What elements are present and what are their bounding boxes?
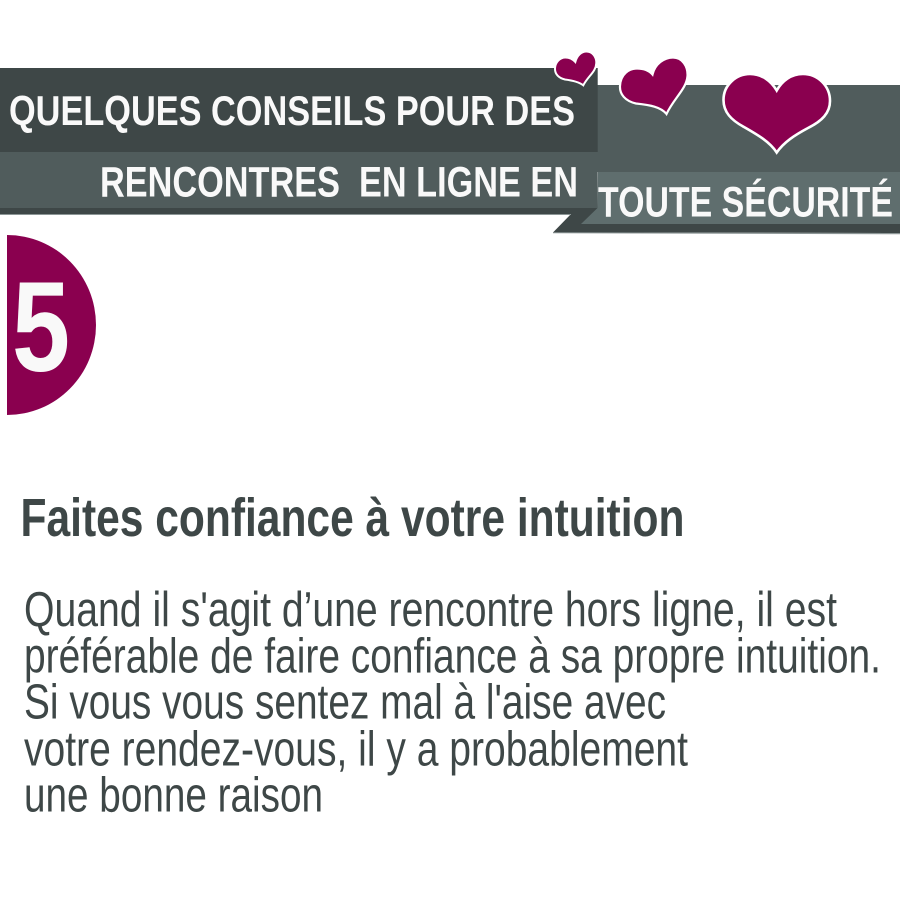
tip body text: une bonne raison bbox=[24, 769, 323, 823]
tip body text: Si vous vous sentez mal à l'aise avec bbox=[24, 676, 666, 730]
heading line 1: QUELQUES CONSEILS POUR DES bbox=[9, 87, 575, 134]
icon: large heart bbox=[724, 74, 830, 152]
tip body text bbox=[24, 583, 881, 823]
heading line 2: RENCONTRES EN LIGNE EN bbox=[100, 158, 578, 206]
tip title: Faites confiance à votre intuition bbox=[20, 488, 684, 548]
tip body text: votre rendez-vous, il y a probablement bbox=[24, 723, 688, 777]
ribbon left band bbox=[0, 68, 598, 215]
number badge bbox=[7, 235, 96, 415]
icon: small heart bbox=[555, 52, 596, 85]
icon: medium heart bbox=[620, 58, 688, 114]
badge number 5: 5 bbox=[12, 256, 70, 399]
header ribbon bbox=[0, 52, 900, 234]
badge half circle bbox=[7, 235, 96, 415]
ribbon right band bbox=[553, 85, 900, 234]
